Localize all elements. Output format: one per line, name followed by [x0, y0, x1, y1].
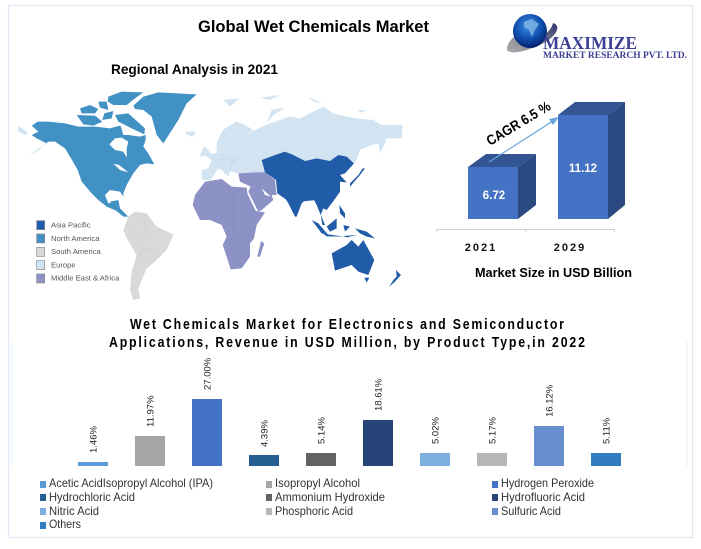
- logo wordmark: MAXIMIZE: [543, 33, 637, 53]
- map: Alaska tip and Iceland: [18, 126, 195, 136]
- world map: [18, 92, 403, 300]
- bars: [78, 399, 621, 466]
- bar: 2021: 6.72: [483, 190, 505, 202]
- bar value labels: 18.61%: [374, 378, 384, 411]
- legend item: Asia Pacific: Asia Pacific: [51, 221, 91, 230]
- legend item: Others: Others: [49, 517, 81, 531]
- bar: 2029: 11.12: [569, 163, 597, 175]
- chart caption: Market Size in USD Billion: [475, 265, 632, 280]
- map region: Asia Pacific: [262, 152, 401, 287]
- legend item: Sulfuric Acid: Sulfuric Acid: [501, 504, 561, 518]
- bar value labels: 5.02%: [430, 417, 442, 444]
- map region: Africa: [193, 179, 265, 269]
- logo subtitle: MARKET RESEARCH PVT. LTD.: [543, 51, 687, 61]
- map region: North America: [30, 92, 197, 214]
- title: Global Wet Chemicals Market: [198, 18, 429, 36]
- bar value labels: 5.17%: [488, 417, 498, 444]
- bar: 2029: [558, 102, 625, 219]
- logo: Maximize Market Research: [507, 14, 687, 61]
- bar value labels: 11.97%: [146, 395, 156, 427]
- map legend: [37, 221, 120, 283]
- bar value labels: [88, 357, 612, 453]
- legend item: Acetic Acid: Acetic AcidIsopropyl Alcohol (IPA): [49, 476, 213, 490]
- map region: Middle East: [238, 172, 277, 212]
- CAGR label: CAGR 6.5 %: [483, 98, 554, 149]
- icon: globe with swoosh: [507, 14, 557, 52]
- bar value labels: 1.46%: [88, 426, 100, 453]
- legend item: South America: South America: [51, 247, 102, 256]
- bar value labels: 5.11%: [602, 417, 612, 444]
- market size 3D bar chart: [436, 98, 632, 280]
- legend item: Nitric Acid: Nitric Acid: [49, 504, 99, 518]
- legend item: Hydrogen Peroxide: Hydrogen Peroxide: [501, 476, 594, 490]
- bar: 2021: [468, 154, 536, 219]
- legend item: North America: North America: [51, 234, 100, 243]
- map region: South America: [123, 212, 173, 300]
- bar value labels: 4.39%: [260, 420, 270, 447]
- chart heading: [109, 316, 585, 350]
- legend item: Phosphoric Acid: Phosphoric Acid: [275, 504, 353, 518]
- arrow: CAGR growth: [489, 117, 559, 162]
- bar value labels: 27.00%: [202, 357, 214, 390]
- heading: regional analysis: Regional Analysis in 2021: [111, 61, 278, 77]
- axis: [436, 230, 614, 232]
- bar value labels: 5.14%: [316, 417, 328, 444]
- axis label: 2029: 2029: [554, 242, 586, 254]
- legend item: Ammonium Hydroxide: Ammonium Hydroxide: [275, 490, 385, 504]
- legend item: Middle East and Africa: Middle East & Africa: [51, 274, 120, 283]
- chart heading: Applications, Revenue in USD Million, by Product Type,in 2022: [109, 334, 585, 350]
- legend item: Isopropyl Alcohol: Isopropyl Alcohol: [275, 476, 360, 490]
- bar value labels: 16.12%: [544, 384, 556, 417]
- legend item: Hydrochloric Acid: Hydrochloric Acid: [49, 490, 135, 504]
- chart heading: Wet Chemicals Market for Electronics and Semiconductor: [130, 316, 565, 332]
- axis label: 2021: 2021: [465, 242, 497, 254]
- map region: Europe and Russia: [190, 95, 403, 180]
- map region: Central America: [110, 200, 128, 217]
- product type legend: [40, 476, 594, 531]
- product type bar chart: [78, 357, 621, 466]
- legend item: Hydrofluoric Acid: Hydrofluoric Acid: [501, 490, 585, 504]
- legend item: Europe: Europe: [51, 261, 76, 270]
